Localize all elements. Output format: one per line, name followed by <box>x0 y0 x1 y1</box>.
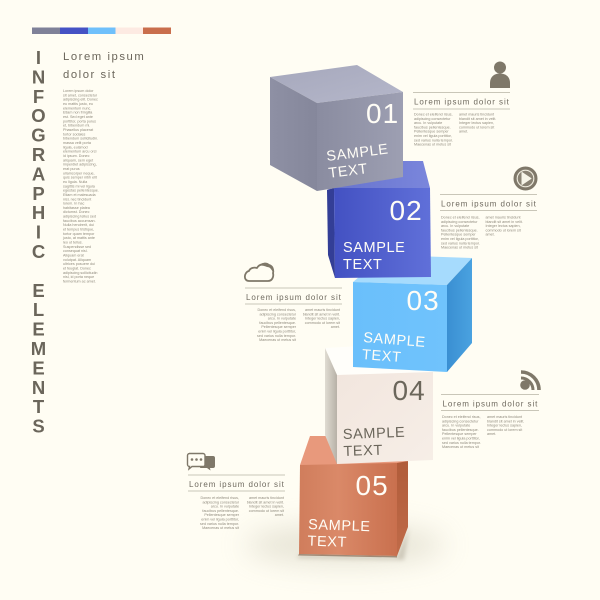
text columns: faucibus pellentesque. <box>442 428 479 432</box>
text columns: amet mauris tincidunt <box>486 216 521 220</box>
label: sample text 02: SAMPLE <box>343 240 405 256</box>
text columns: adipiscing consectetur <box>414 117 451 121</box>
text columns: amet mauris tincidunt <box>305 308 340 312</box>
left body text: justo, at mattis ante <box>62 236 95 240</box>
text columns: blandit sit amet in velit. <box>459 117 496 121</box>
left body text: elementum arcu orci <box>63 150 97 154</box>
left body text: Etiam et malesuada <box>63 193 97 197</box>
text columns: faucibus pellentesque. <box>414 125 451 129</box>
number 02: 02 <box>390 195 423 226</box>
text columns: adipiscing consectetur <box>442 419 479 423</box>
text columns: arcu. In vulputate <box>441 224 469 228</box>
vertical title: N <box>32 377 45 398</box>
left body text: sagittis mi vel ligula <box>63 184 96 188</box>
text columns: Donec et eleifend risus, <box>441 216 480 220</box>
text columns: blandit sit amet in velit. <box>303 312 340 316</box>
text columns: amet. <box>487 432 496 436</box>
text columns: faucibus pellentesque. <box>441 228 478 232</box>
text columns: Pellentesque semper <box>204 513 240 517</box>
icon: chat bubbles <box>188 454 215 470</box>
left body text: faucibus accumsan. <box>63 219 96 223</box>
text columns: arcu. In vulputate <box>268 317 296 321</box>
left body text: fermentum ac amet. <box>63 280 96 284</box>
text columns: adipiscing consectetur <box>202 500 240 504</box>
left body text: erat purus <box>63 167 80 171</box>
text columns: amet. <box>331 325 340 329</box>
text columns: Donec et eleifend risus, <box>442 415 481 419</box>
text columns: Maecenas ut metus sit <box>441 246 478 250</box>
label: sample text 02: TEXT <box>343 257 382 273</box>
vertical title: E <box>32 280 45 301</box>
vertical title: P <box>32 183 45 204</box>
text columns: sed varius nulla tempor. <box>441 241 480 245</box>
text columns: Pellentesque semper <box>442 432 477 436</box>
left body text: adipiscing sollicitudin <box>63 271 97 275</box>
vertical title: N <box>32 66 45 87</box>
vertical title: L <box>33 299 44 320</box>
text columns: enim vel ligula porttitor, <box>414 134 452 138</box>
label: sample text 03: SAMPLE <box>363 330 426 351</box>
left body text: aliquam, sem eget <box>63 158 93 162</box>
text columns: Integer lectus sapien, <box>459 121 494 125</box>
text columns: sed varius nulla tempor. <box>257 334 296 338</box>
left body text: Phasellus placerat <box>63 128 93 132</box>
text columns: commodo ut lorem sit <box>249 509 284 513</box>
vertical title: I <box>36 222 41 243</box>
left body text: consequat nisl. <box>63 249 88 253</box>
text columns: Integer lectus sapien, <box>249 505 284 509</box>
cube 04 <box>325 345 433 464</box>
text columns: blandit sit amet in velit. <box>486 220 523 224</box>
left body text: dictumst. Donec <box>63 210 90 214</box>
left body text: bibendum sollicitudin. <box>63 137 98 141</box>
text columns: sed varius nulla tempor. <box>442 441 481 445</box>
vertical title: S <box>32 416 45 437</box>
text columns: sed varius nulla tempor. <box>200 522 239 526</box>
label: sample text 01: TEXT <box>328 161 369 182</box>
heading: Lorem ipsum dolor sit <box>442 400 538 408</box>
text columns: amet mauris tincidunt <box>487 415 522 419</box>
left body text: adipiscing tellus sed <box>63 215 96 219</box>
vertical title: F <box>33 86 44 107</box>
text columns: blandit sit amet in velit. <box>487 419 524 423</box>
text columns: enim vel ligula porttitor, <box>201 518 239 522</box>
left body text: quis semper nibh elit <box>63 176 97 180</box>
text columns: commodo ut lorem sit <box>305 321 340 325</box>
text columns: Integer lectus sapien, <box>305 317 340 321</box>
label: sample text 05 <box>307 517 371 552</box>
text columns: faucibus pellentesque. <box>259 321 296 325</box>
text columns: Pellentesque semper <box>441 233 476 237</box>
text columns: Pellentesque semper <box>261 325 297 329</box>
text columns: Maecenas ut metus sit <box>259 338 296 342</box>
left body text: tortor sodales <box>63 132 85 136</box>
left body text: tortor quam tempor <box>63 232 95 236</box>
icon: cloud <box>245 263 274 281</box>
panel: chat <box>188 454 285 530</box>
number 05: 05 <box>356 470 389 501</box>
text columns: Donec et eleifend risus, <box>414 112 453 116</box>
text columns: Pellentesque semper <box>414 130 449 134</box>
vertical title: G <box>31 125 46 146</box>
vertical title: R <box>32 144 45 165</box>
text columns: blandit sit amet in velit. <box>247 500 284 504</box>
left body text: leo ut tellus. <box>63 241 83 245</box>
left body text: elementum nunc. <box>63 106 91 110</box>
text columns: arcu. In vulputate <box>211 505 239 509</box>
text columns: amet mauris tincidunt <box>249 496 284 500</box>
label: sample text 05: SAMPLE <box>308 517 371 535</box>
vertical title: A <box>32 163 45 184</box>
left body text: Aliquam erat <box>63 254 84 258</box>
heading: Lorem ipsum dolor sit <box>441 200 537 208</box>
number 03: 03 <box>406 285 440 316</box>
vertical title: E <box>32 319 45 340</box>
text columns: faucibus pellentesque. <box>202 509 239 513</box>
label: sample text 01 <box>326 141 392 182</box>
left body text: Nulla hendrerit, dui <box>63 223 94 227</box>
text columns: sed varius nulla tempor. <box>414 138 453 142</box>
cube 05 <box>298 436 408 558</box>
ground shadow <box>245 525 445 565</box>
text columns: Maecenas ut metus sit <box>414 143 451 147</box>
left body text: eu ligula. Nulla <box>63 180 88 184</box>
heading: Lorem ipsum dolor sit <box>246 293 342 302</box>
left body text: Etiam non fringilla <box>63 111 93 115</box>
label: sample text 01: SAMPLE <box>326 141 389 165</box>
left body text: adipiscing elit. Donec <box>63 98 98 102</box>
vertical title: I <box>36 47 41 68</box>
text columns: amet. <box>275 513 284 517</box>
text columns: enim vel ligula porttitor, <box>258 330 296 334</box>
heading: Lorem ipsum dolor sit <box>189 480 285 489</box>
left body text: et tempus tristique, <box>63 228 94 232</box>
heading: Lorem ipsum dolor sit <box>414 98 510 106</box>
cube 01 <box>270 65 403 191</box>
label: sample text 04 <box>343 425 406 460</box>
left body text: et feugiat. Donec <box>63 267 91 271</box>
left body text: est. Sed eget ante <box>63 115 93 119</box>
text columns: amet. <box>459 130 468 134</box>
left body text: id ipsum. Donec <box>63 154 90 158</box>
left body text: ultrices posuere dui <box>63 262 95 266</box>
text columns: amet mauris tincidunt <box>459 112 494 116</box>
panel: play <box>440 168 537 250</box>
left body text: nisl, id porta neque <box>63 275 94 279</box>
icon: rss <box>520 372 539 390</box>
text columns: commodo ut lorem sit <box>487 428 522 432</box>
subtitle: dolor sit <box>63 69 117 81</box>
text columns: arcu. In vulputate <box>442 424 470 428</box>
vertical title: E <box>32 357 45 378</box>
text columns: Donec et eleifend risus, <box>200 496 239 500</box>
left body text: Suspendisse sed <box>63 245 91 249</box>
text columns: adipiscing consectetur <box>260 312 297 316</box>
left body text: Lorem ipsum dolor <box>63 89 94 93</box>
left body text: et, bibendum mi. <box>63 124 90 128</box>
cube 02 <box>327 161 431 278</box>
colour key bar <box>32 28 171 34</box>
text columns: arcu. In vulputate <box>414 121 442 125</box>
panel: person <box>413 62 510 147</box>
text columns: Donec et eleifend risus, <box>257 308 296 312</box>
left body text: imperdiet adipiscing, <box>63 163 97 167</box>
text columns: enim vel ligula porttitor, <box>441 237 479 241</box>
number 04: 04 <box>392 375 426 406</box>
text columns: commodo ut lorem sit <box>459 125 494 129</box>
panel: rss <box>441 372 539 449</box>
text columns: Integer lectus sapien, <box>486 224 521 228</box>
vertical title: H <box>32 202 45 223</box>
text columns: enim vel ligula porttitor, <box>442 436 480 440</box>
left body text: sit amet, consectetur <box>63 93 98 97</box>
text columns: adipiscing consectetur <box>441 220 478 224</box>
label: sample text 04: SAMPLE <box>343 425 406 443</box>
label: sample text 05: TEXT <box>307 533 347 551</box>
text columns: Integer lectus sapien, <box>487 424 522 428</box>
left body text: lorem. In hac <box>63 202 84 206</box>
left body text: volutpat. Aliquam <box>63 258 91 262</box>
label: sample text 03 <box>361 330 426 368</box>
subtitle: Lorem ipsum <box>63 51 145 63</box>
icon: person <box>490 62 510 88</box>
left body text: porttitor, porta purus <box>63 119 96 123</box>
vertical title: M <box>31 338 46 359</box>
icon: play <box>515 168 536 189</box>
text columns: Maecenas ut metus sit <box>442 445 479 449</box>
left body text: nisi, nec tincidunt <box>63 197 91 201</box>
cube 03 <box>353 255 472 372</box>
vertical title: T <box>33 396 45 417</box>
label: sample text 03: TEXT <box>361 347 402 366</box>
text columns: amet. <box>486 233 495 237</box>
text columns: commodo ut lorem sit <box>486 228 521 232</box>
left body text: habitasse platea <box>63 206 91 210</box>
label: sample text 04: TEXT <box>343 443 383 460</box>
panel: cloud <box>245 263 342 342</box>
left body text: egestas pellentesque. <box>63 189 99 193</box>
number 01: 01 <box>366 98 399 129</box>
vertical title: C <box>32 241 45 262</box>
left body text: massa velit porta <box>63 141 92 145</box>
left body text: eu mattis justo, eu <box>63 102 93 106</box>
text columns: Maecenas ut metus sit <box>202 526 239 530</box>
left body text: ligula, euismod <box>63 145 88 149</box>
vertical title: O <box>31 105 46 126</box>
left body text: ullamcorper neque, <box>63 171 95 175</box>
